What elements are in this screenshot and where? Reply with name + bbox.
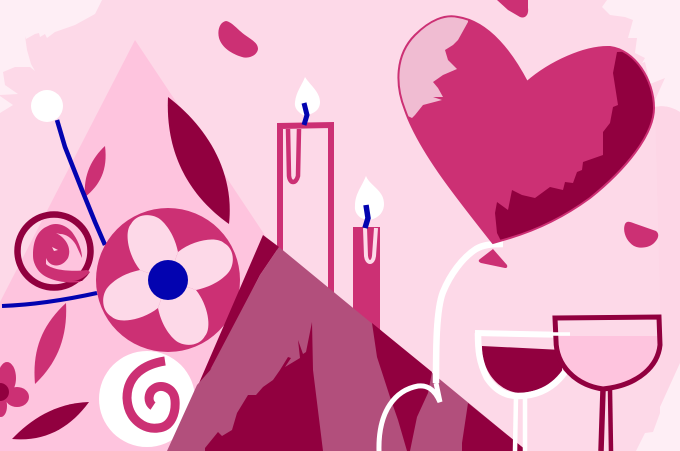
wick: short candle [365,205,368,228]
petal: right [624,222,658,248]
brush wash: top right [602,0,680,112]
candle: tall [280,125,331,300]
small flower: bottom left [0,362,29,417]
candle: short [353,227,380,337]
leaf: bottom dark [12,402,89,439]
petal: top centre [497,0,528,18]
white bud [31,90,63,122]
mountain table [167,235,527,451]
brush wash: top left [0,0,102,113]
balloon string [379,244,503,451]
blue stem: lower [2,293,97,306]
blue stem: upper [57,120,105,245]
flame: short candle [355,176,384,220]
brush wash: right side [655,106,680,407]
brush wash: bottom right [636,363,680,451]
wine glass: left white [475,333,570,451]
leaf: lower left [34,303,66,384]
leaf: small upper [85,146,106,197]
flower: large with blue centre [96,208,240,352]
balloon knot triangle [479,249,507,268]
background triangle [0,40,300,451]
rose: white circle spiral [99,351,195,447]
wine glass: right pink [553,317,660,451]
flame: tall candle [295,77,320,115]
wick: tall candle [304,103,307,125]
heart shadow [495,52,653,240]
heart highlight [399,17,468,118]
petal: top left [218,21,258,58]
leaf: large dark [168,97,230,224]
heart balloon [397,15,655,244]
rose: outlined top left [18,214,90,288]
